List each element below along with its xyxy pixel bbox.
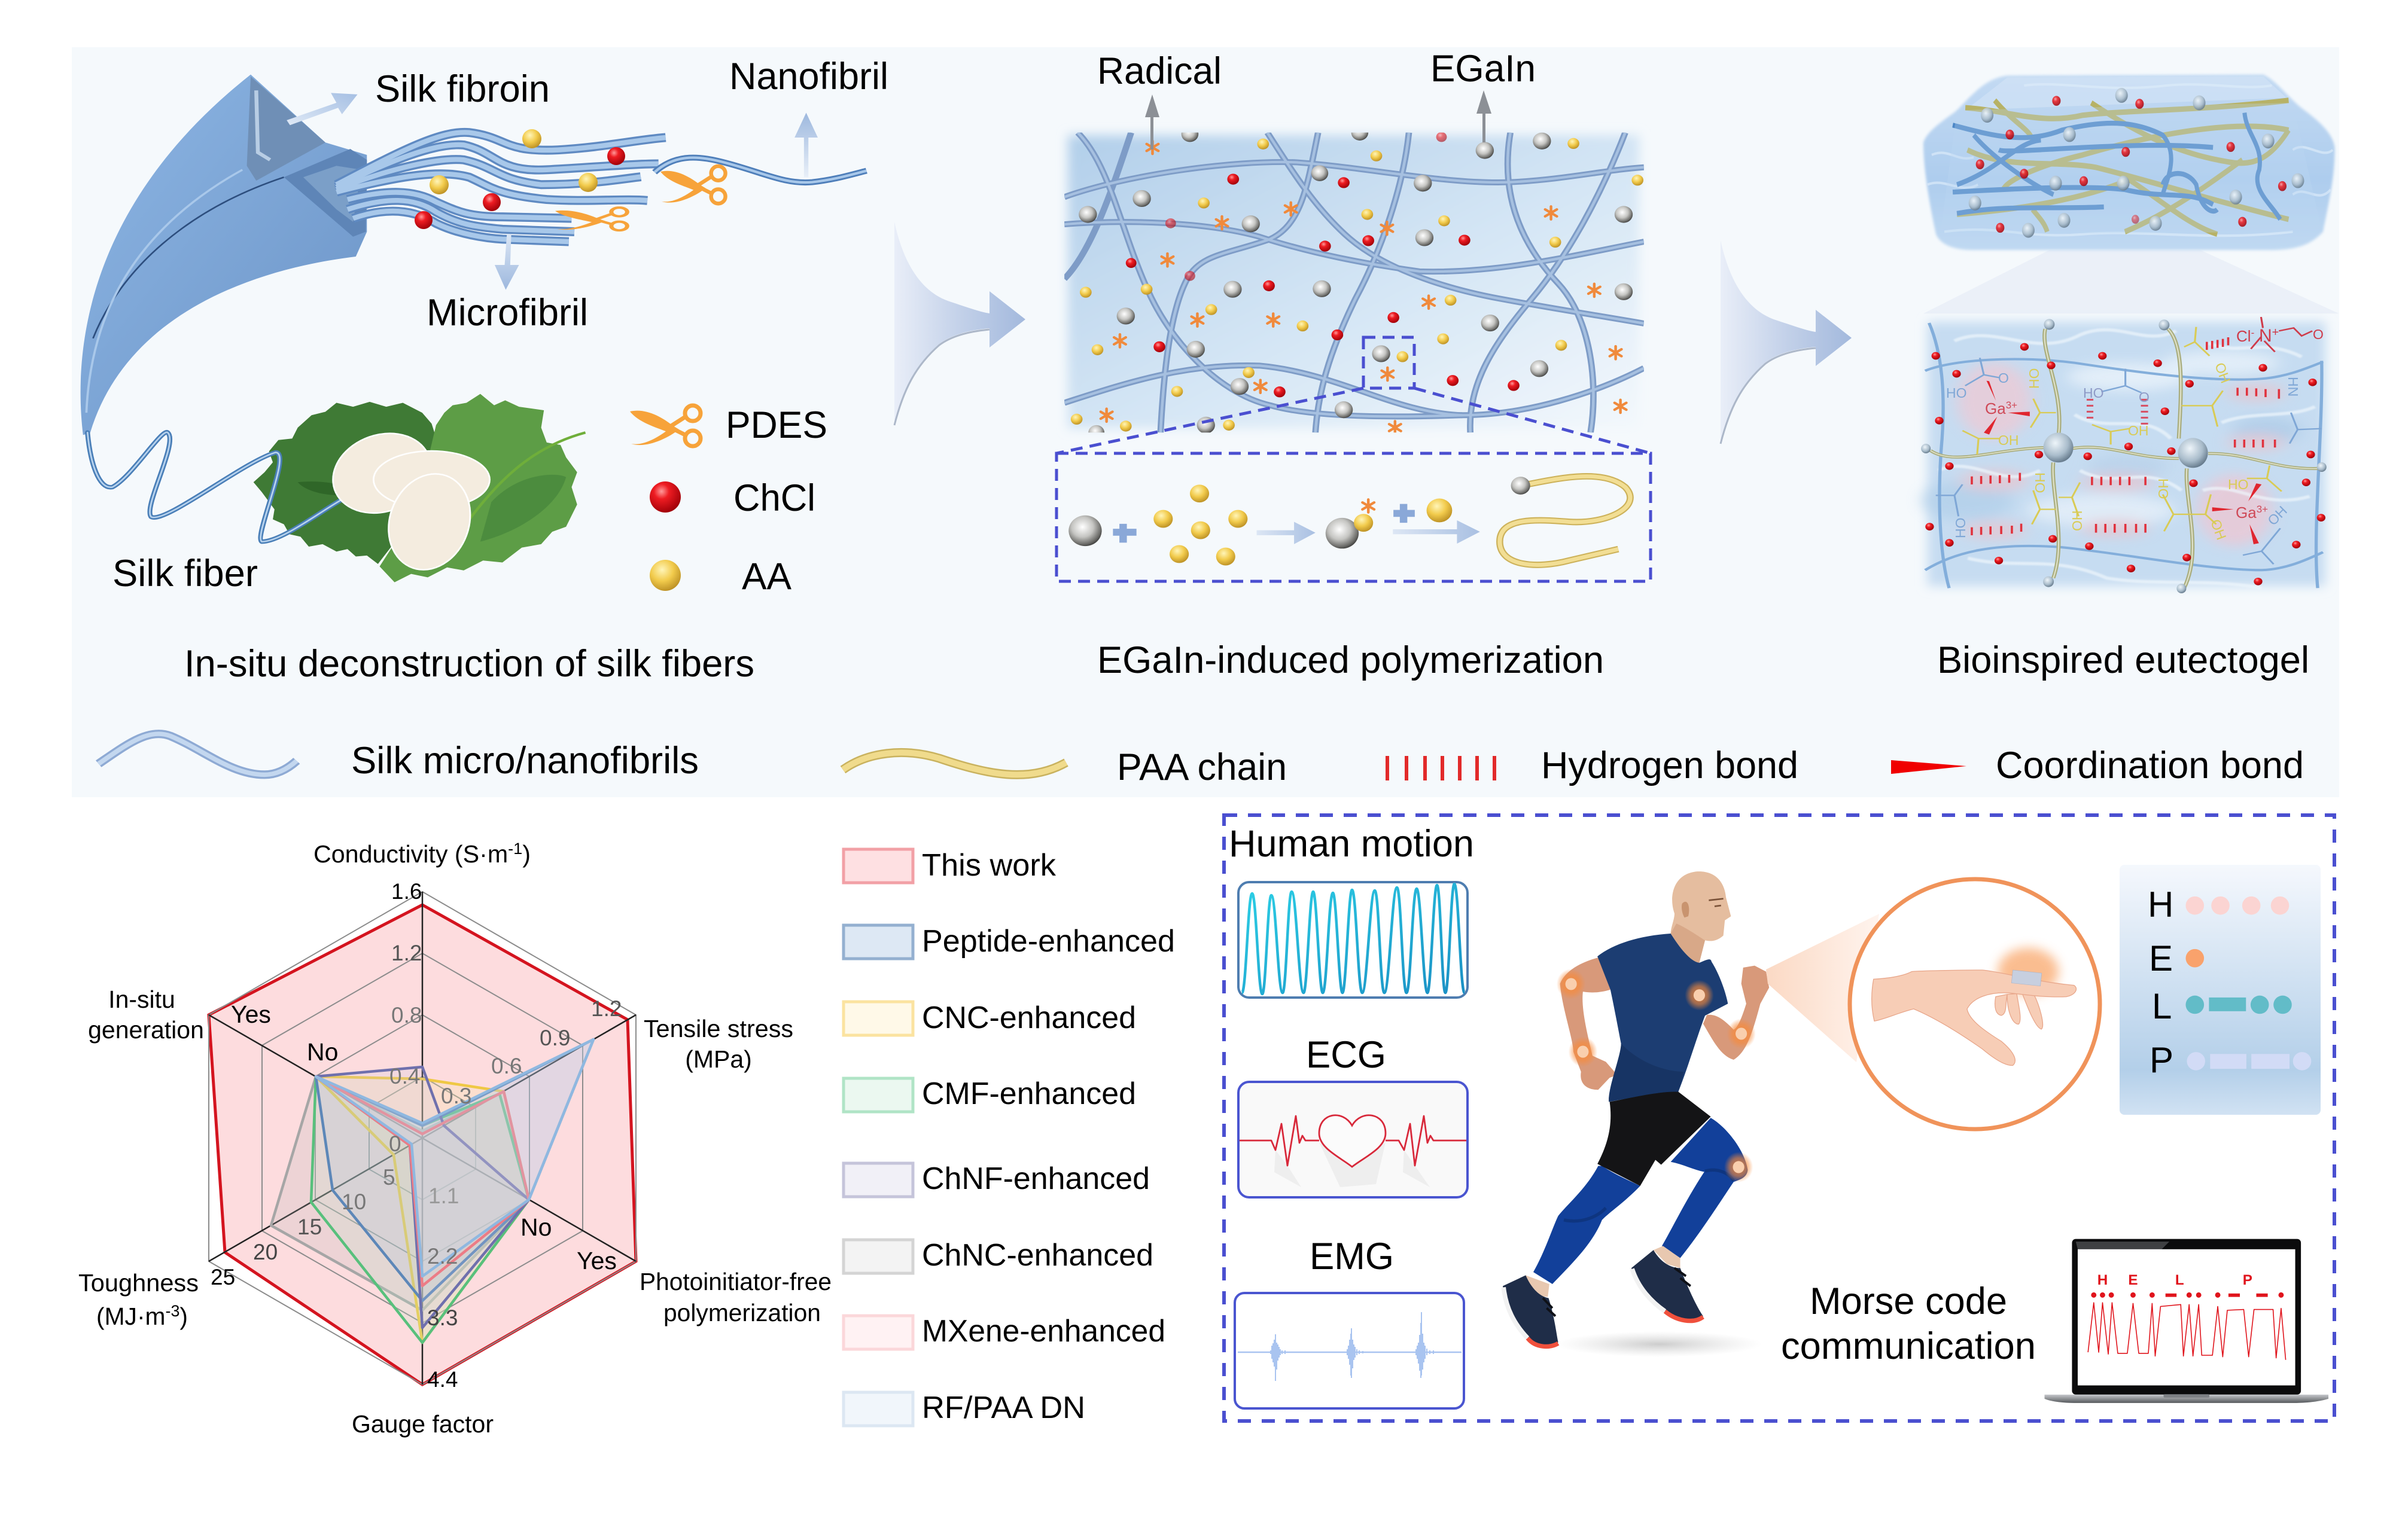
panel: top process background — [72, 47, 2339, 797]
axis tick numbers: 0.8 — [391, 1003, 422, 1027]
axis tick numbers: No — [307, 1038, 338, 1066]
label: Silk fiber: Silk fiber — [112, 553, 258, 594]
axis tick numbers: No — [520, 1213, 552, 1241]
labels: chemical groups: O — [2313, 327, 2324, 342]
labels: chemical groups: O — [2139, 389, 2150, 405]
icon: PDES scissors — [630, 405, 701, 446]
labels: chemical groups: OH — [1998, 432, 2018, 448]
axis titles: Conductivity (S·m — [313, 840, 507, 868]
labels: chemical groups: 3+ — [2257, 504, 2268, 515]
icon: shorts — [1597, 1091, 1711, 1186]
label: Radical: Radical — [1097, 50, 1222, 92]
text: Morse code communication — [1781, 1280, 2036, 1367]
axis titles: Tensile stress — [644, 1015, 793, 1042]
heading: EGaIn-induced polymerization: EGaIn-induced polymerization — [1097, 639, 1604, 681]
series: This work — [209, 905, 636, 1385]
axis tick numbers: 5 — [383, 1165, 395, 1190]
axis titles: polymerization — [663, 1299, 821, 1326]
label: EMG: EMG — [1310, 1236, 1394, 1277]
axis tick numbers: 20 — [253, 1240, 278, 1264]
label: Microfibril: Microfibril — [427, 292, 588, 334]
legend: silk micro/nanofibrils: Silk micro/nanofibrils — [351, 740, 699, 782]
illustration: runner — [1503, 871, 1769, 1357]
icon: AA and ChCl particles — [415, 129, 625, 229]
labels: chemical groups: OH — [2264, 503, 2290, 529]
icon: silk fiber thread — [87, 432, 342, 542]
icon: nanofibril scissors — [660, 166, 726, 203]
arrow: second process arrow — [1721, 240, 1852, 444]
series: comparison materials — [271, 1039, 593, 1343]
icon: reaction scheme — [1068, 476, 1630, 565]
labels: chemical groups: HO — [2032, 472, 2048, 493]
labels: chemical groups: HO — [2026, 368, 2042, 389]
label: EGaIn: EGaIn — [1430, 48, 1536, 90]
labels: chemical groups: OH — [2212, 361, 2234, 385]
axis tick numbers: 1.6 — [391, 879, 422, 904]
legend: radar materials — [844, 848, 1175, 1426]
icon: rear arm — [1560, 957, 1617, 1090]
labels: chemical groups: Ga — [1985, 400, 2006, 417]
chart: silk fibril network and particles — [1064, 124, 1644, 440]
panel: HELP Morse code table: E — [2149, 938, 2173, 978]
legend: radar materials: RF/PAA DN — [922, 1390, 1085, 1425]
icon: leaves — [254, 394, 586, 583]
axis tick numbers: 15 — [297, 1215, 322, 1239]
icon: head — [1671, 871, 1731, 963]
heading: In-situ deconstruction of silk fibers: In-situ deconstruction of silk fibers — [184, 643, 754, 685]
icon: microfibril arrow — [495, 234, 519, 289]
icon: shirt — [1597, 934, 1728, 1102]
icon: nanofibril arrow — [794, 113, 818, 177]
panel: eutectogel molecular structure — [1921, 317, 2327, 593]
icon: laptop with Morse signal — [2045, 1239, 2328, 1403]
panel: HELP Morse code table: P — [2150, 1040, 2173, 1080]
axis tick numbers: 1.2 — [391, 941, 422, 965]
label: Silk fibroin: Silk fibroin — [375, 68, 550, 110]
panel: EGaIn network — [1064, 124, 1644, 440]
icon: AA ball — [650, 560, 681, 591]
labels: chemical groups: OH — [2208, 517, 2230, 542]
axis titles: In-situ — [108, 986, 175, 1013]
axis titles: generation — [88, 1016, 204, 1044]
axis titles: (MPa) — [685, 1045, 752, 1073]
icon: laptop with Morse signal: L — [2175, 1272, 2184, 1288]
icon: silk fiber body — [81, 75, 367, 435]
icon: front leg — [1662, 1118, 1747, 1258]
icon: hand with sensor — [1872, 948, 2077, 1065]
labels: chemical groups: 3+ — [2006, 400, 2017, 411]
chart: EMG trace — [1235, 1293, 1464, 1408]
icon: sensors — [1557, 969, 1756, 1182]
axis titles: -3 — [166, 1302, 179, 1320]
chart: polymer chains — [1925, 317, 2323, 588]
axis tick numbers: 4.4 — [427, 1367, 458, 1392]
legend: radar materials: Peptide-enhanced — [922, 924, 1175, 959]
axis tick numbers — [211, 879, 622, 1392]
label: Nanofibril: Nanofibril — [729, 56, 888, 97]
legend: radar materials: MXene-enhanced — [922, 1314, 1165, 1349]
labels: chemical groups: HO — [1953, 518, 1968, 538]
chart: ECG heart trace — [1238, 1082, 1468, 1197]
callout: finger sensor magnifier — [1766, 879, 2100, 1129]
icon: lower fiber end face — [284, 149, 367, 237]
icon: rear leg — [1533, 1166, 1640, 1284]
icon: silk cocoons — [316, 418, 490, 578]
axis titles: Gauge factor — [352, 1410, 494, 1438]
arrow: radical pointer — [1145, 94, 1159, 150]
icon: front arm — [1703, 966, 1769, 1060]
labels: chemical groups — [1946, 326, 2324, 542]
text: Morse code communication: Morse code — [1810, 1280, 2007, 1322]
axis titles: Toughness — [78, 1269, 199, 1297]
axis tick numbers: 0.6 — [491, 1054, 522, 1078]
callout: zoomed reaction box — [1057, 337, 1651, 581]
axis tick numbers: 1.1 — [428, 1184, 459, 1208]
axis tick numbers: 10 — [342, 1190, 366, 1214]
labels: chemical groups: N — [2259, 326, 2272, 346]
axis tick numbers: 1.2 — [591, 996, 622, 1021]
chart: human motion waveform — [1238, 882, 1468, 998]
legend: silk micro/nanofibrils — [99, 734, 699, 782]
chart: radar comparison — [78, 840, 832, 1438]
arrow: first process arrow — [894, 222, 1025, 425]
axis titles — [78, 840, 832, 1438]
heading: Human motion: Human motion — [1229, 823, 1474, 865]
icon: front shoe — [1631, 1246, 1703, 1322]
axis tick numbers: Yes — [231, 1001, 271, 1028]
icon: fibroin arrow — [287, 93, 358, 125]
axis titles: -1 — [508, 840, 522, 858]
icon: laptop with Morse signal: H — [2097, 1272, 2108, 1288]
legend: coordination bond: Coordination bond — [1996, 745, 2304, 786]
labels: chemical groups: OH — [2128, 423, 2149, 438]
labels: chemical groups: O — [1998, 370, 2009, 386]
arrow: EGaIn pointer — [1476, 90, 1491, 142]
label: AA: AA — [742, 556, 791, 597]
icon: upper fiber end face — [247, 77, 325, 181]
icon: microfibril scissors — [555, 208, 627, 230]
legend: PAA chain: PAA chain — [1117, 746, 1287, 788]
axis tick numbers: 3.3 — [427, 1306, 458, 1330]
label: PDES: PDES — [726, 404, 827, 446]
icon: laptop with Morse signal: P — [2243, 1272, 2252, 1288]
panel: applications dashed frame — [1224, 815, 2334, 1421]
legend: radar materials: ChNC-enhanced — [922, 1238, 1153, 1273]
axis tick numbers: 25 — [211, 1265, 235, 1289]
legend: hydrogen bond: Hydrogen bond — [1541, 745, 1798, 786]
legend: radar materials: CMF-enhanced — [922, 1077, 1136, 1111]
icon: eutectogel block — [1923, 75, 2339, 313]
heading: Bioinspired eutectogel: Bioinspired eutectogel — [1937, 639, 2309, 681]
axis tick numbers: Yes — [577, 1247, 617, 1274]
labels: chemical groups: HN — [2285, 377, 2301, 397]
labels: chemical groups: Ga — [2236, 504, 2257, 522]
legend: PAA chain — [843, 746, 1287, 788]
labels: chemical groups: HO — [2228, 477, 2248, 492]
legend: radar materials: CNC-enhanced — [922, 1001, 1136, 1035]
grid: hexagons and axes — [209, 892, 636, 1385]
label: ECG: ECG — [1306, 1034, 1386, 1076]
icon: ChCl ball — [650, 481, 681, 513]
text: Morse code communication: communication — [1781, 1325, 2036, 1367]
axis tick numbers: 0 — [389, 1132, 401, 1156]
axis tick numbers: 0.3 — [441, 1084, 471, 1108]
labels: chemical groups: Cl — [2236, 327, 2251, 345]
icon: laptop with Morse signal: E — [2128, 1272, 2138, 1288]
legend: radar materials: ChNF-enhanced — [922, 1161, 1150, 1196]
labels: chemical groups: + — [2272, 326, 2279, 339]
label: ChCl: ChCl — [733, 477, 815, 519]
icon: rear shoe — [1503, 1275, 1558, 1347]
icon: microfibril bundles — [336, 132, 866, 242]
labels: chemical groups: OH — [2069, 511, 2085, 531]
panel: HELP Morse code table — [2120, 865, 2321, 1115]
labels: chemical groups: HO — [2155, 478, 2171, 499]
axis titles: ) — [179, 1303, 188, 1330]
axis tick numbers: 2.2 — [427, 1244, 458, 1268]
axis tick numbers: 0.4 — [389, 1064, 420, 1088]
axis tick numbers: 0.9 — [540, 1026, 570, 1050]
legend: hydrogen bond — [1387, 745, 1798, 786]
labels: chemical groups: HO — [2083, 385, 2103, 401]
axis titles: Photoinitiator-free — [640, 1268, 832, 1295]
axis titles: ) — [522, 840, 531, 868]
icon: Morse dots and dashes — [2185, 896, 2311, 1071]
labels: chemical groups: HO — [1946, 385, 1967, 401]
icon: silk fiber and microfibril illustration — [81, 75, 866, 583]
axis titles: (MJ·m — [96, 1303, 166, 1330]
labels: chemical groups: - — [2251, 327, 2254, 339]
panel: HELP Morse code table: L — [2152, 986, 2172, 1026]
legend: radar materials: This work — [922, 848, 1057, 883]
panel: HELP Morse code table: H — [2148, 885, 2173, 925]
